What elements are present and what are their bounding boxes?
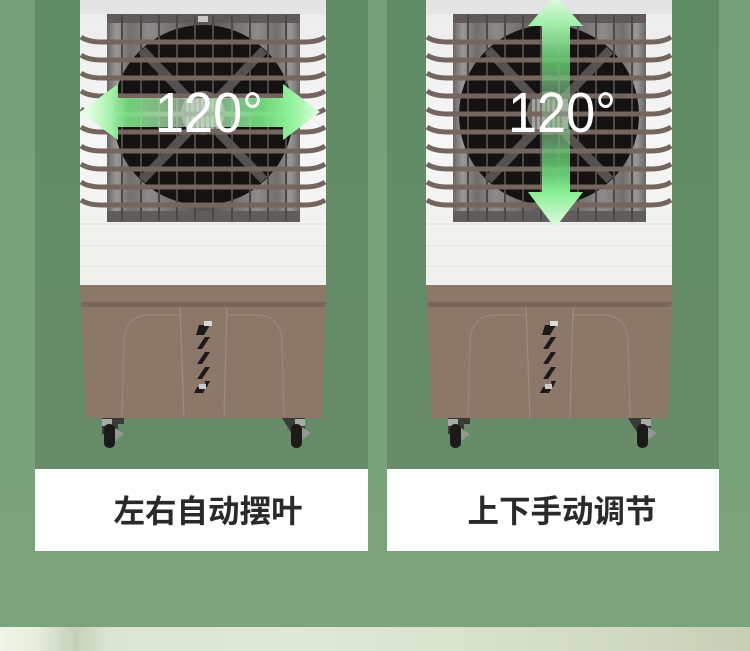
panel: right swing: [387, 0, 719, 469]
caption text: left: 左右自动摆叶: [113, 493, 303, 529]
arrow: vertical double arrow: [528, 0, 583, 228]
caption card: right: [387, 469, 719, 551]
air cooler: right: [426, 0, 673, 448]
arrow: horizontal double arrow: [80, 84, 320, 140]
angle label: right: 120°: [508, 81, 616, 145]
caption card: left: [35, 469, 368, 551]
caption text: right: 上下手动调节: [467, 493, 657, 529]
panel: left swing: [35, 0, 368, 469]
air cooler: left: [80, 0, 327, 448]
angle label: left: 120°: [155, 81, 263, 145]
bottom gradient strip: [0, 627, 750, 651]
